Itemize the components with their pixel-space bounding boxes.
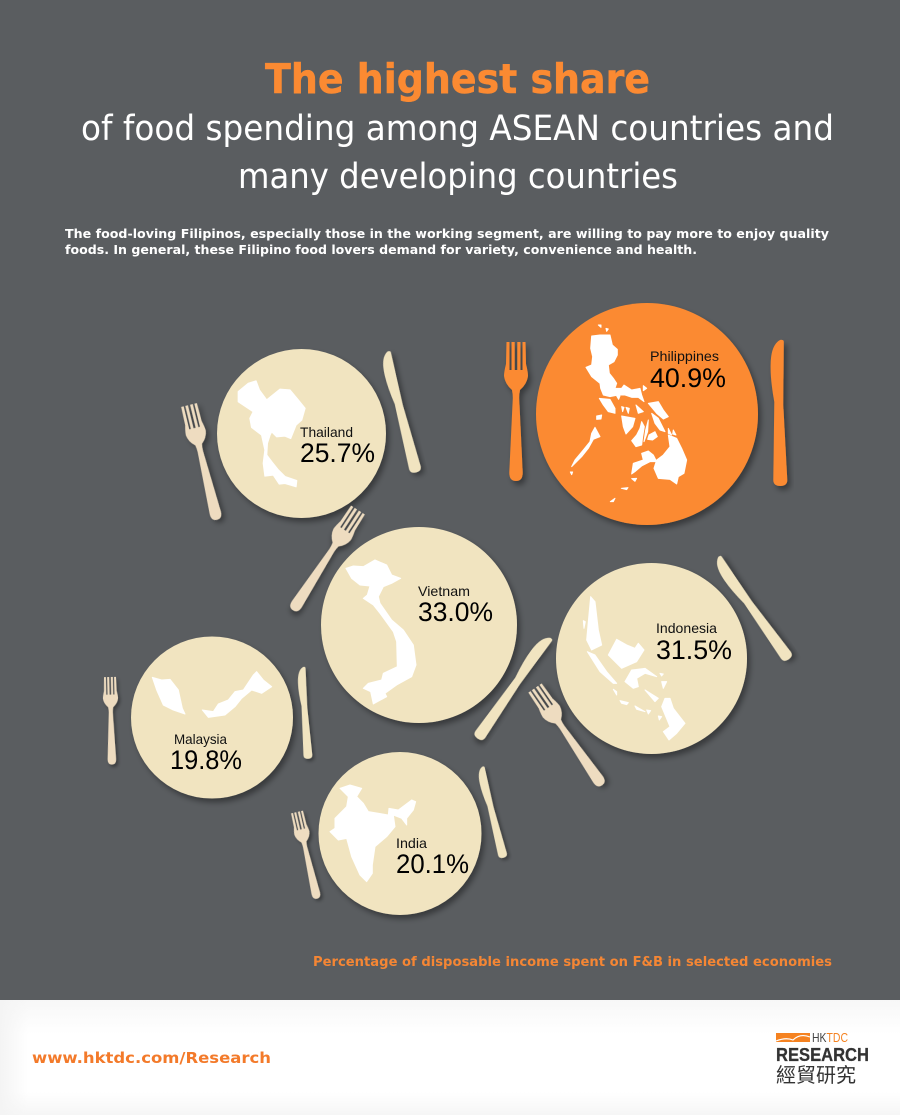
plate: India xyxy=(318,752,482,915)
value: Vietnam: 33.0% xyxy=(418,597,493,627)
subheading line 1: of food spending among ASEAN countries and xyxy=(81,109,834,149)
map: Philippines xyxy=(570,325,687,502)
value: Philippines: 40.9% xyxy=(650,363,726,393)
plate setting: Philippines xyxy=(504,303,787,525)
intro text: The food-loving Filipinos, especially those in the working segment, are willing to pay more to enjoy quality xyxy=(65,226,829,241)
fork: Malaysia xyxy=(102,677,120,765)
map: Thailand xyxy=(238,381,305,487)
knife: India xyxy=(476,766,508,859)
value: Malaysia: 19.8% xyxy=(170,745,242,775)
label: India: India xyxy=(396,835,427,851)
plate: Indonesia xyxy=(556,563,747,754)
label: Vietnam: Vietnam xyxy=(418,583,470,599)
logo word RESEARCH: RESEARCH xyxy=(776,1045,869,1065)
logo: HKTDC Research xyxy=(776,1030,869,1087)
plate setting: India xyxy=(290,752,508,915)
intro text xyxy=(65,226,829,257)
logo mark xyxy=(776,1033,810,1042)
footer url: www.hktdc.com/Research xyxy=(32,1049,271,1067)
map: Malaysia xyxy=(152,672,272,717)
logo wordmark HKTDC: HKTDC xyxy=(812,1030,848,1045)
label: Indonesia: Indonesia xyxy=(656,620,717,636)
fork: Indonesia xyxy=(527,682,610,791)
fork: Thailand xyxy=(179,403,227,522)
value: India: 20.1% xyxy=(396,849,469,879)
fork: India xyxy=(290,810,324,900)
plate setting: Indonesia xyxy=(527,553,794,791)
plate: Vietnam xyxy=(321,527,517,723)
plate: Thailand xyxy=(217,349,386,518)
label: Philippines: Philippines xyxy=(650,348,719,364)
knife: Malaysia xyxy=(297,667,312,759)
knife: Vietnam xyxy=(471,633,555,742)
plate setting: Malaysia xyxy=(102,636,312,798)
plate: Malaysia xyxy=(131,636,293,798)
knife: Thailand xyxy=(380,350,422,474)
fork: Vietnam xyxy=(284,504,367,616)
footer band xyxy=(0,1000,900,1115)
knife: Philippines xyxy=(771,340,787,486)
plate setting: Vietnam xyxy=(284,504,555,742)
heading: highest share: The highest share xyxy=(265,55,650,103)
fork: Philippines xyxy=(504,342,528,481)
subheading line 2: many developing countries xyxy=(238,157,678,197)
value: Thailand: 25.7% xyxy=(300,438,375,468)
label: Thailand: Thailand xyxy=(300,424,353,440)
label: Malaysia: Malaysia xyxy=(174,731,227,747)
plate setting: Thailand xyxy=(179,349,422,522)
logo Chinese name: 經貿研究 xyxy=(776,1064,856,1087)
plate: Philippines xyxy=(536,303,758,525)
chart caption: Percentage of disposable income spent on F&B in selected economies xyxy=(313,955,832,970)
map: India xyxy=(330,785,416,882)
value: Indonesia: 31.5% xyxy=(656,635,732,665)
map: Indonesia xyxy=(583,597,685,740)
intro text: foods. In general, these Filipino food lovers demand for variety, convenience and health. xyxy=(65,242,697,257)
title xyxy=(81,55,834,197)
knife: Indonesia xyxy=(711,553,794,664)
map: Vietnam xyxy=(346,560,416,704)
